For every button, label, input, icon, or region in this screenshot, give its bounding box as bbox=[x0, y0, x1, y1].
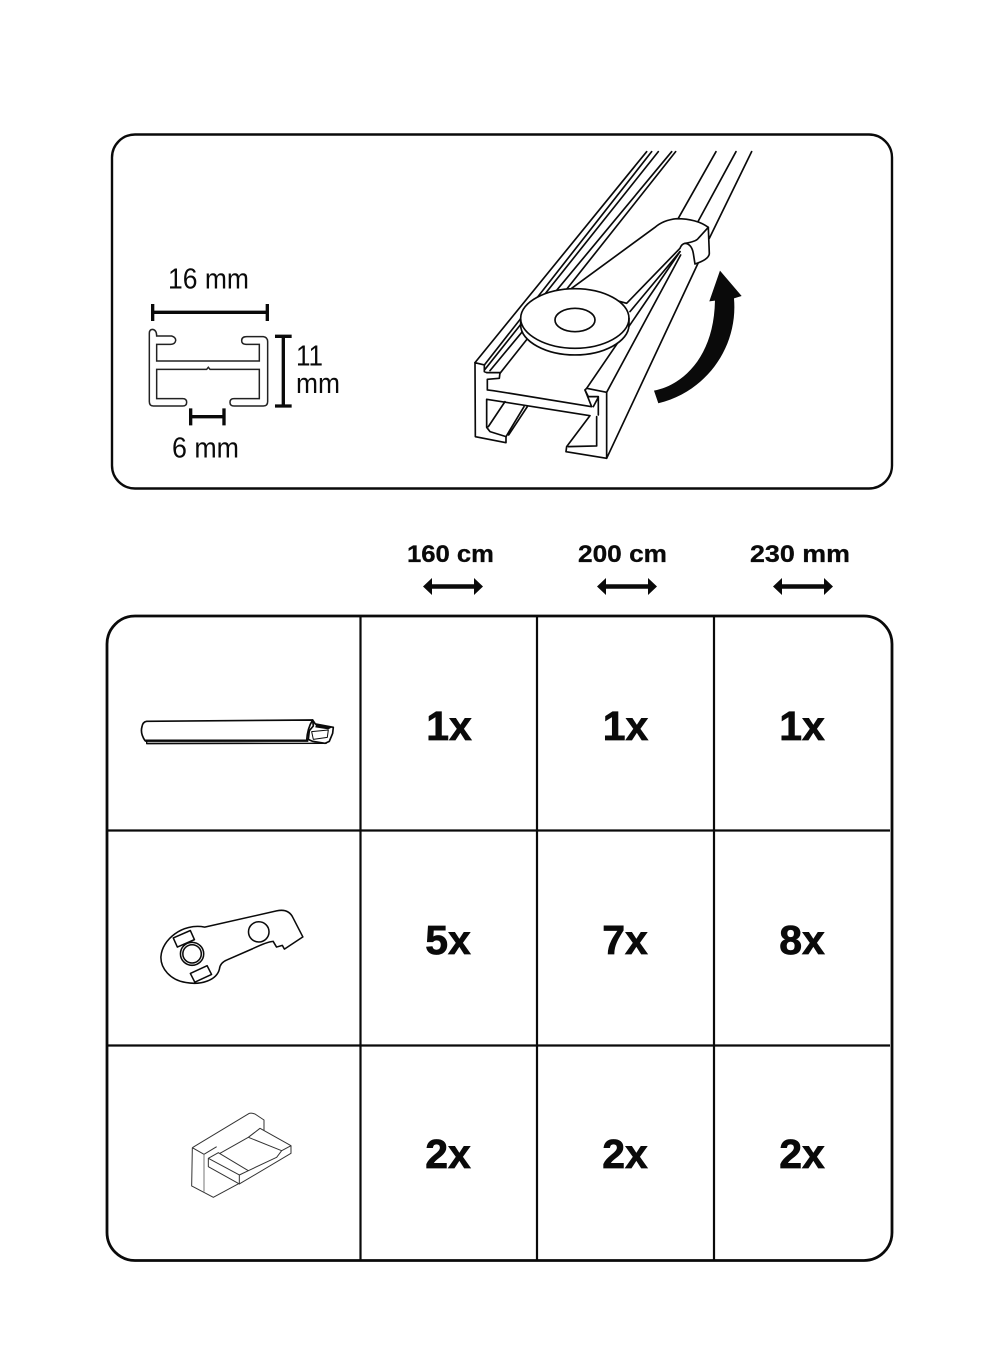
rail inner details bbox=[568, 390, 598, 447]
row 2 quantities: 7x bbox=[602, 917, 648, 963]
label: 16 mm: 16 mm bbox=[168, 264, 249, 296]
column headers: rail lengths bbox=[407, 541, 850, 595]
glider disc bbox=[521, 289, 629, 355]
table: parts quantities bbox=[107, 616, 892, 1260]
channel lines behind end profile bbox=[488, 402, 527, 437]
table grid bbox=[107, 616, 890, 1260]
label: 11 mm: 11 bbox=[296, 340, 323, 372]
illustration: glider clipped into rail bbox=[475, 152, 752, 458]
row 1 quantities: 1x bbox=[426, 703, 472, 749]
dimension bar: 11 mm height bbox=[275, 336, 292, 406]
header: 160 cm: 160 cm bbox=[407, 541, 494, 568]
row 1 quantities bbox=[426, 703, 825, 749]
arrow: 200 cm bbox=[597, 578, 657, 595]
curved rotation arrow bbox=[654, 271, 742, 403]
header: 200 cm: 200 cm bbox=[578, 541, 667, 568]
dimension bar: 6 mm opening bbox=[191, 408, 224, 425]
rail end profile bbox=[475, 363, 607, 458]
row 2 quantities: 8x bbox=[779, 917, 825, 963]
dimension bar: 16 mm width bbox=[153, 304, 267, 321]
table frame bbox=[107, 616, 892, 1260]
panel: rail profile and mounting bbox=[112, 134, 892, 488]
label: 6 mm: 6 mm bbox=[172, 432, 239, 464]
icon: end cap bbox=[192, 1113, 291, 1197]
diagram: rail cross-section with dimensions bbox=[149, 264, 340, 464]
glider arm bbox=[572, 219, 709, 303]
row 1 quantities: 1x bbox=[779, 703, 825, 749]
rail profile outline bbox=[149, 329, 268, 406]
row 2 quantities bbox=[425, 917, 825, 963]
header: 230 mm: 230 mm bbox=[750, 541, 850, 568]
row 3 quantities: 2x bbox=[602, 1131, 648, 1177]
label: mm unit: mm bbox=[296, 368, 340, 400]
arrow: 230 mm bbox=[773, 578, 833, 595]
glider disc hole bbox=[555, 308, 595, 332]
row 2 quantities: 5x bbox=[425, 917, 471, 963]
row 3 quantities: 2x bbox=[425, 1131, 471, 1177]
arrow: 160 cm bbox=[423, 578, 483, 595]
row 3 quantities: 2x bbox=[779, 1131, 825, 1177]
row 3 quantities bbox=[425, 1131, 825, 1177]
icon: rail piece bbox=[141, 720, 333, 744]
row 1 quantities: 1x bbox=[603, 703, 648, 749]
icon: glider bbox=[161, 910, 303, 983]
rail long edges bbox=[475, 152, 752, 458]
